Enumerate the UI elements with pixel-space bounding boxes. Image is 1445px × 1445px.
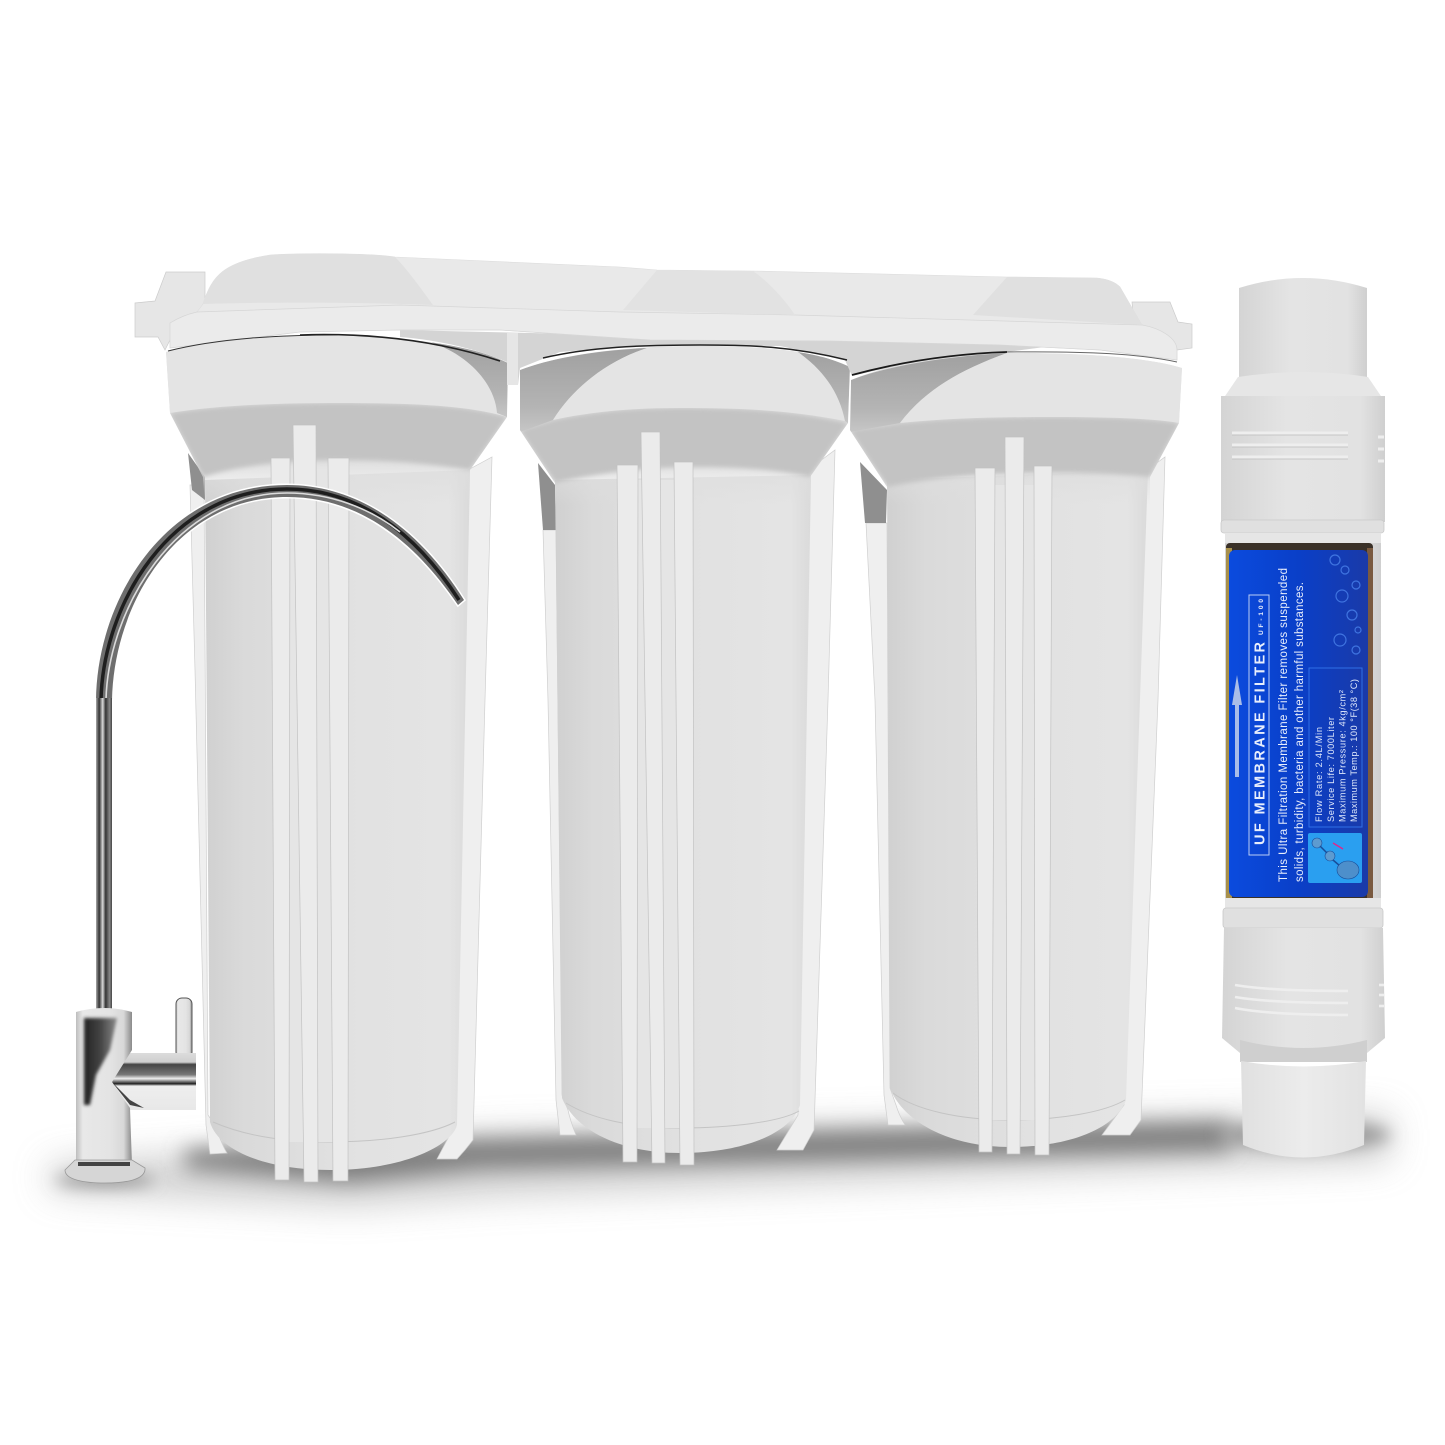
specs: Flow Rate: 2.4L/Min xyxy=(1314,727,1324,822)
icon: wrench instruction xyxy=(1308,833,1362,883)
body 2 xyxy=(555,475,811,1153)
specs: Maximum Temp.: 100 °F(38 °C) xyxy=(1349,679,1359,822)
ribs 2 xyxy=(617,432,694,1165)
body 3 xyxy=(887,470,1148,1147)
fins 3 xyxy=(860,457,1165,1135)
direction arrow xyxy=(1232,675,1242,777)
bubbles xyxy=(1330,555,1361,654)
bottom tube xyxy=(1241,1061,1366,1158)
gooseneck xyxy=(96,485,464,700)
blue label xyxy=(1229,550,1368,897)
description: This Ultra Filtration Membrane Filter removes suspended xyxy=(1278,568,1290,882)
UF membrane filter xyxy=(1221,278,1385,1158)
body 1 xyxy=(205,470,470,1170)
fins 1 xyxy=(188,453,492,1159)
support post xyxy=(507,333,518,385)
lever xyxy=(176,998,192,1058)
stem xyxy=(96,698,112,1014)
left connector xyxy=(135,272,205,350)
specs: Maximum Pressure: 4kg/cm² xyxy=(1338,690,1348,822)
faucet xyxy=(65,485,464,1183)
shoulder xyxy=(1221,372,1385,402)
floor shadow xyxy=(50,1115,1390,1205)
body reflection xyxy=(84,1018,117,1105)
specs: Service Life: 7000Liter xyxy=(1326,717,1336,822)
dome 3 xyxy=(973,277,1142,325)
bracket plate xyxy=(170,254,1177,360)
lower sleeve xyxy=(1222,928,1385,1053)
right connector xyxy=(1132,302,1192,350)
fins 2 xyxy=(538,450,835,1150)
ribs 1 xyxy=(271,425,349,1182)
label backing xyxy=(1226,543,1373,905)
specs xyxy=(1314,679,1359,822)
cap 3 xyxy=(850,353,1182,487)
filter housing 1 xyxy=(160,330,515,1182)
title box xyxy=(1249,595,1269,855)
model: UF-100 xyxy=(1258,599,1265,635)
tube under label xyxy=(1225,543,1381,909)
base xyxy=(65,1160,145,1183)
description line 2: solids, turbidity, bacteria and other harmful substances. xyxy=(1294,582,1306,882)
upper sleeve xyxy=(1221,396,1385,522)
body xyxy=(76,1008,132,1165)
top bracket xyxy=(135,254,1192,385)
upper ridges xyxy=(1232,433,1384,461)
dome 1 xyxy=(203,254,433,305)
title: UF MEMBRANE FILTER xyxy=(1252,641,1268,845)
spec box xyxy=(1309,668,1362,827)
upper rings xyxy=(1221,520,1384,533)
cap 2 xyxy=(520,346,850,483)
gap lines xyxy=(168,335,1177,375)
bracket underside xyxy=(400,330,1060,385)
lower ridges xyxy=(1235,985,1384,1015)
bracket lip xyxy=(170,305,1177,360)
product scene xyxy=(40,254,1407,1222)
side handle xyxy=(112,1053,196,1110)
top tube xyxy=(1239,278,1367,380)
filter housing 2 xyxy=(515,340,855,1165)
ribs 3 xyxy=(975,437,1052,1155)
cap 1 xyxy=(166,336,508,500)
filter housing 3 xyxy=(845,345,1185,1155)
dome 2 xyxy=(623,270,795,315)
lower rings xyxy=(1225,898,1381,910)
